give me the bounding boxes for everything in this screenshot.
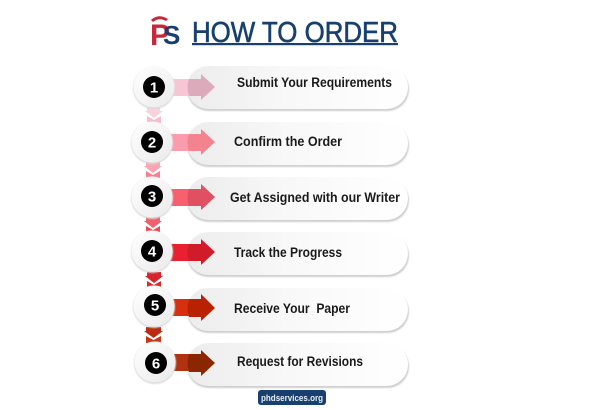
step 5 — [133, 286, 409, 333]
label 5: Receive Your Paper — [234, 301, 351, 316]
label 3: Get Assigned with our Writer — [230, 190, 401, 205]
number badge 3 — [131, 176, 173, 219]
number badge 2: 2 — [148, 134, 156, 152]
step 1 — [133, 66, 409, 111]
pill: step 5 — [187, 288, 409, 333]
footer badge: phdservices.org — [261, 393, 323, 404]
connector arrow 3 to 4 — [144, 217, 162, 233]
number badge 2 — [131, 122, 173, 164]
connector arrow 5 to 6 — [144, 327, 163, 343]
connector arrow 1 to 2 — [145, 107, 163, 123]
step 6 — [134, 342, 409, 388]
arrow: step 1 — [170, 74, 215, 100]
number badge 1 — [133, 66, 175, 109]
number badge 3: 3 — [148, 188, 156, 206]
icon: PS logo: P — [150, 19, 170, 52]
label 6: Request for Revisions — [237, 354, 363, 369]
arrow: step 2 — [170, 129, 215, 155]
number badge 5: 5 — [151, 298, 159, 314]
number badge 1: 1 — [150, 80, 158, 96]
pill: step 1 — [187, 66, 409, 111]
footer badge — [258, 390, 326, 405]
title: HOW TO ORDER — [192, 17, 398, 49]
title underline — [192, 43, 398, 45]
pill: step 4 — [187, 232, 409, 277]
pill: step 2 — [187, 122, 409, 167]
arrow: step 6 — [172, 350, 215, 376]
arrow: step 3 — [170, 184, 215, 210]
number badge 6 — [134, 342, 176, 384]
arrow: step 4 — [170, 239, 215, 265]
step 4 — [131, 230, 409, 277]
label 2: Confirm the Order — [234, 134, 343, 149]
number badge 4 — [131, 230, 173, 273]
icon: PS logo: S — [163, 20, 180, 50]
arrow: step 5 — [172, 294, 215, 321]
pill: step 3 — [187, 177, 409, 222]
label 4: Track the Progress — [234, 245, 342, 260]
step 2 — [131, 122, 409, 167]
icon: PS logo — [150, 16, 180, 52]
number badge 6: 6 — [152, 356, 160, 372]
number badge 4: 4 — [148, 244, 157, 260]
step 3 — [131, 176, 409, 222]
connector arrow 2 to 3 — [144, 162, 162, 178]
header: logo and title — [150, 16, 398, 52]
number badge 5 — [133, 286, 175, 328]
label 1: Submit Your Requirements — [237, 75, 392, 90]
pill: step 6 — [187, 343, 409, 388]
connector arrow 4 to 5 — [145, 272, 163, 288]
